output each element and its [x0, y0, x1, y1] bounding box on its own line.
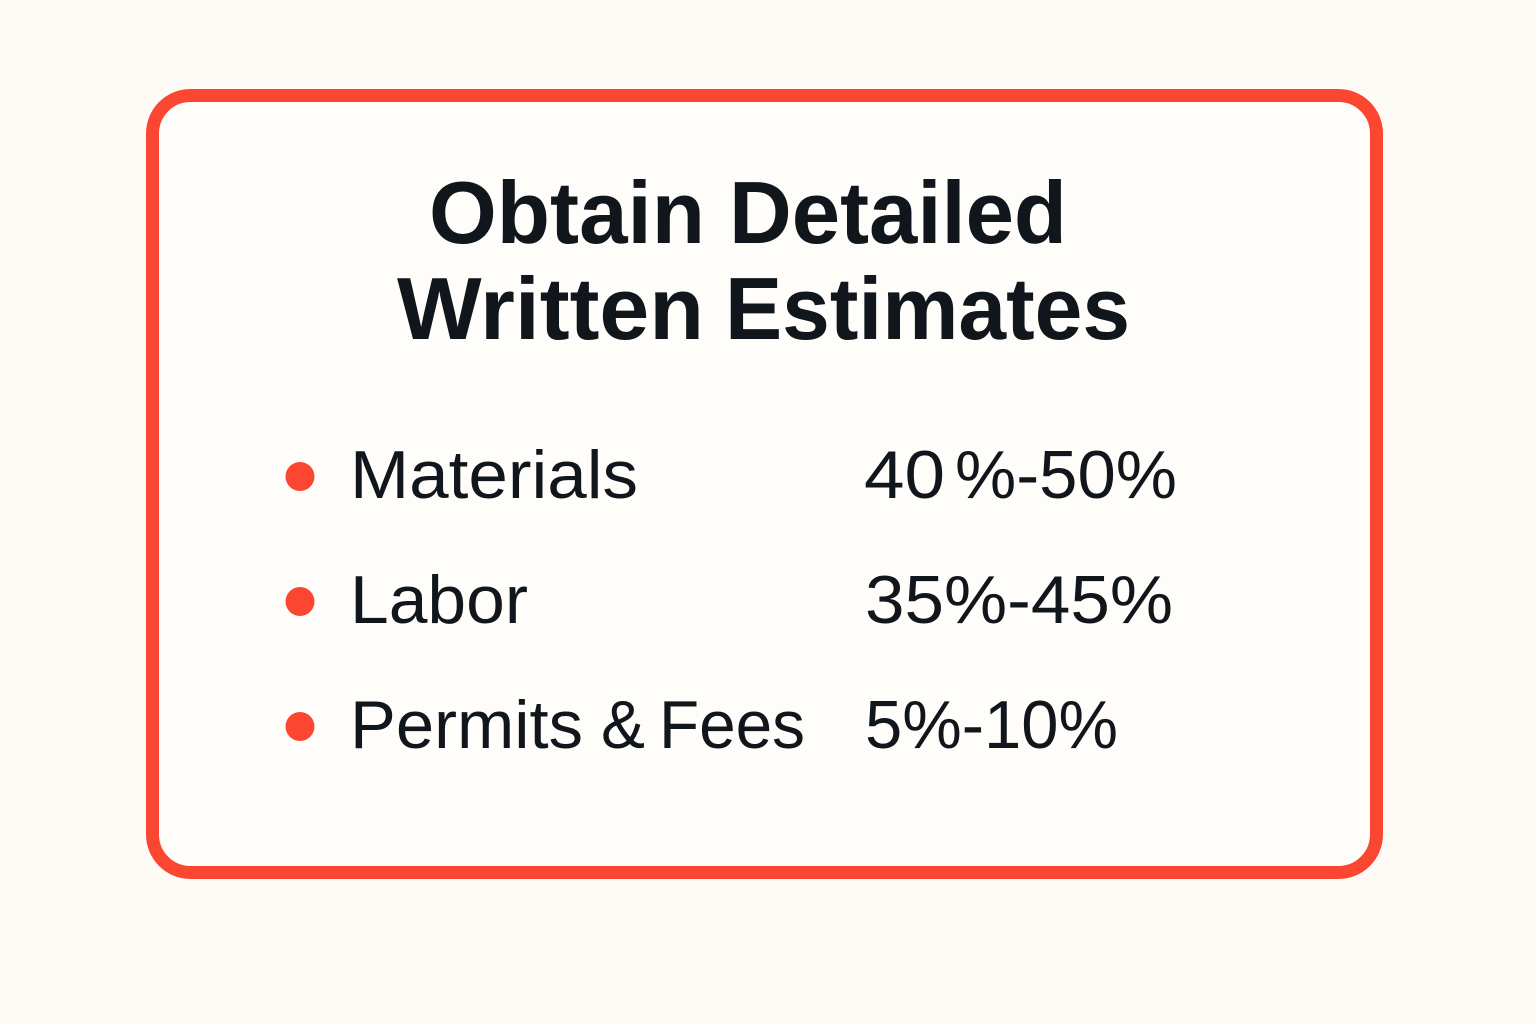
label: permits and fees: Permits — [350, 687, 583, 763]
title: Written — [397, 259, 704, 358]
bullet: labor — [286, 587, 314, 616]
label: permits and fees: Fees — [659, 687, 805, 763]
title: Detailed — [729, 163, 1067, 262]
label: materials: Materials — [350, 437, 638, 513]
label: permits and fees — [350, 687, 805, 763]
row: labor — [286, 562, 1173, 638]
label: labor: Labor — [350, 562, 528, 638]
row: permits and fees — [286, 687, 1118, 763]
title: Estimates — [725, 259, 1130, 358]
bullet: permits and fees — [286, 712, 314, 741]
value: materials: %-50% — [955, 437, 1177, 513]
value: materials: 40 — [864, 437, 945, 513]
title: Obtain — [429, 163, 705, 262]
panel: estimates card — [152, 96, 1376, 872]
title — [397, 163, 1130, 358]
value: permits and fees: 5%-10% — [865, 687, 1118, 763]
row: materials — [286, 437, 1177, 513]
label: permits and fees: & — [601, 687, 645, 763]
bullet: materials — [286, 462, 314, 491]
value: labor: 35%-45% — [865, 562, 1173, 638]
